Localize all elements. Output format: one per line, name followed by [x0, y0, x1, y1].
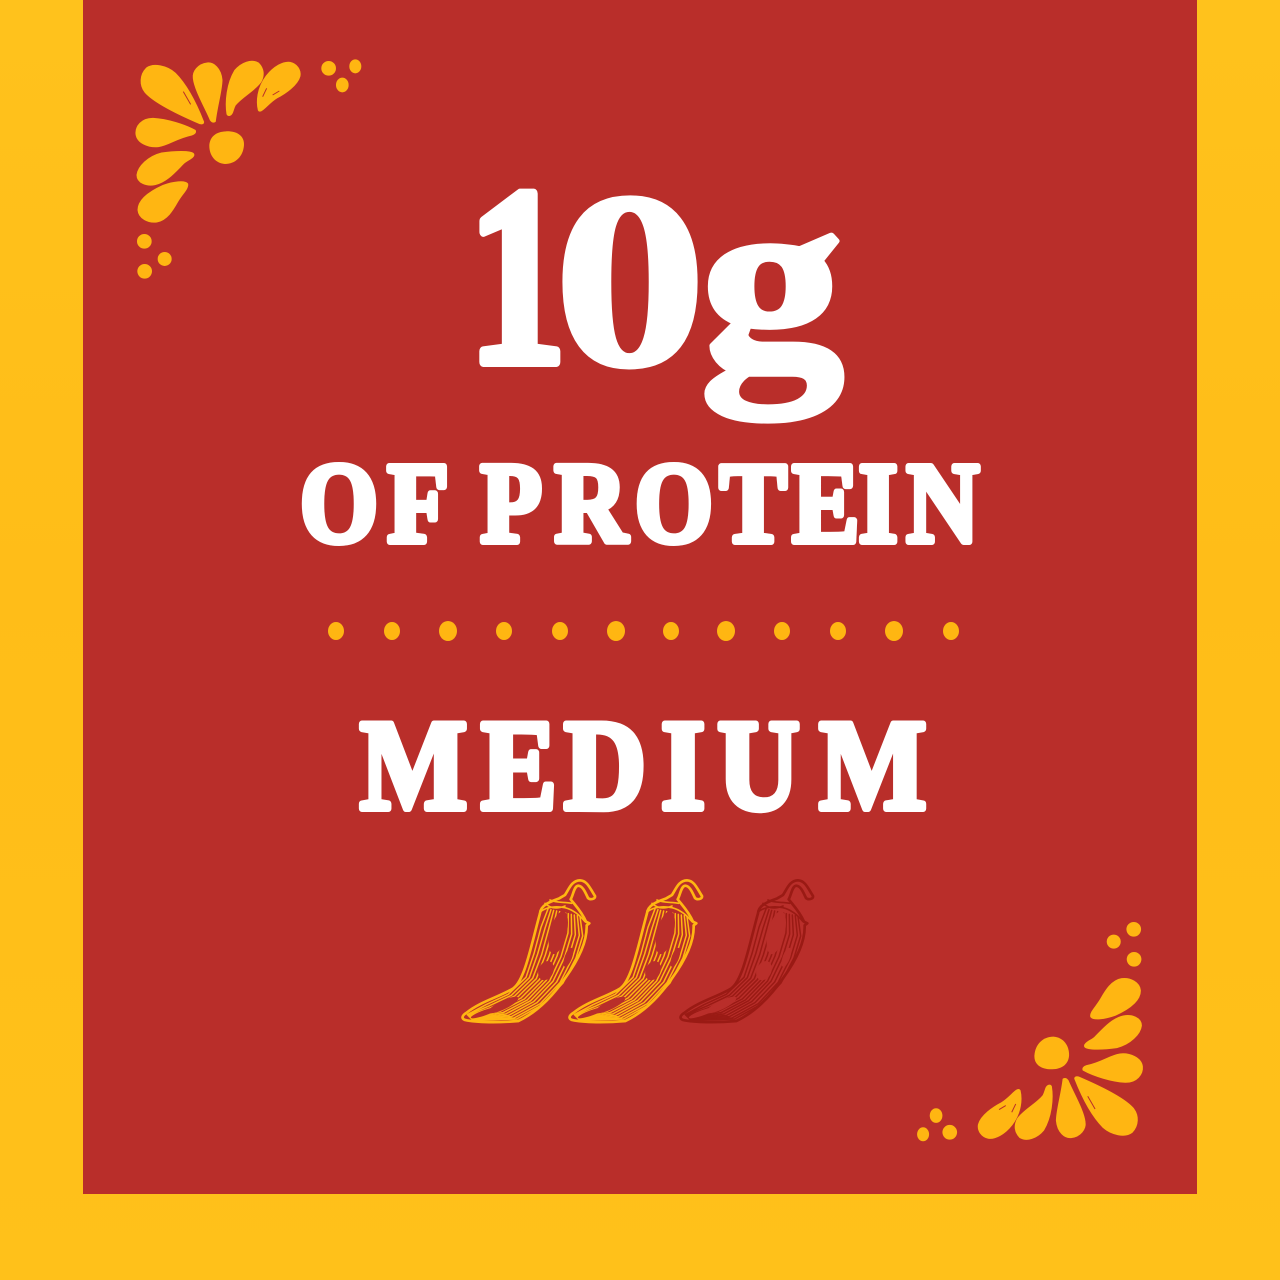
- icon: filled chili 2: [570, 880, 702, 1022]
- chart: spice rating chilies: [463, 880, 813, 1022]
- heading: protein amount: 1: [467, 136, 567, 418]
- icon: top-left floral corner: [136, 59, 361, 279]
- divider: dotted row: [328, 621, 959, 641]
- heading: spice level medium: MEDIUM: [360, 695, 926, 837]
- icon: bottom-right floral corner: [917, 922, 1142, 1141]
- icon: unfilled chili 3: [681, 880, 813, 1022]
- heading: protein amount: [467, 136, 844, 424]
- heading: of protein: OF PROTEIN: [300, 441, 979, 567]
- icon: filled chili 1: [463, 880, 595, 1022]
- heading: protein amount: g: [700, 141, 844, 424]
- heading: protein amount: 0: [553, 141, 707, 420]
